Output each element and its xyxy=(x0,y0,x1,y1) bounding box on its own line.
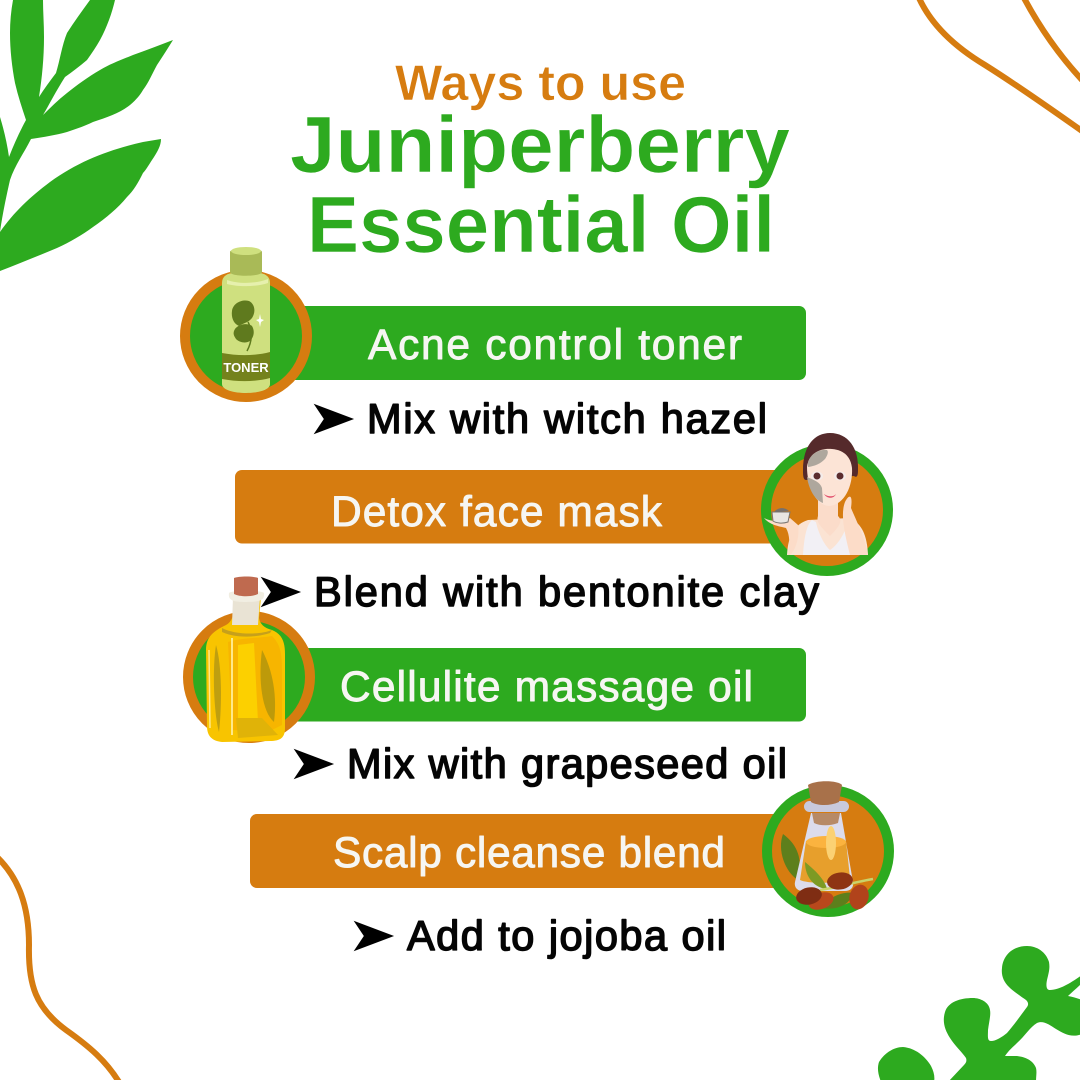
step: Mix with grapeseed oil: Mix with grapeseed oil xyxy=(347,740,787,787)
icon: jojoba oil bottle in green ring xyxy=(767,781,889,913)
decorative curves: top right xyxy=(919,0,1080,131)
decorative curve: bottom left xyxy=(0,858,119,1080)
step: Add to jojoba oil: Add to jojoba oil xyxy=(407,912,726,959)
banner: Scalp cleanse blend xyxy=(250,814,795,888)
step: Mix with witch hazel: Mix with witch hazel xyxy=(367,395,767,442)
icon: yellow oil bottle in orange ring xyxy=(188,576,310,742)
decorative leaf branch: bottom right xyxy=(944,946,1080,1080)
title: Juniperberry: Juniperberry xyxy=(290,100,791,189)
step: Blend with bentonite clay: Blend with bentonite clay xyxy=(314,568,819,615)
step: Add to jojoba oil: ➤ xyxy=(347,907,397,963)
banner: Cellulite massage oil: Cellulite massage oil xyxy=(340,664,753,711)
step: Mix with witch hazel: ➤ xyxy=(307,390,357,446)
banner: Acne control toner: Acne control toner xyxy=(368,322,742,369)
banner: Detox face mask: Detox face mask xyxy=(331,489,663,536)
decorative leaf branch: top left xyxy=(0,0,173,271)
banner: Cellulite massage oil xyxy=(280,648,806,722)
step: Blend with bentonite clay: ➤ xyxy=(254,563,304,619)
title: Ways to use: Ways to use xyxy=(395,55,686,111)
title: Essential Oil: Essential Oil xyxy=(307,180,775,269)
icon: toner bottle in orange ring: TONER xyxy=(223,360,269,375)
icon: toner bottle in orange ring xyxy=(185,247,307,397)
step: Mix with grapeseed oil: ➤ xyxy=(287,735,337,791)
banner: Detox face mask xyxy=(235,470,795,544)
decorative leaf: bottom right small xyxy=(878,1047,934,1080)
banner: Acne control toner xyxy=(280,306,806,380)
icon: woman with clay mask in green ring xyxy=(764,433,888,571)
banner: Scalp cleanse blend: Scalp cleanse blend xyxy=(333,830,725,877)
